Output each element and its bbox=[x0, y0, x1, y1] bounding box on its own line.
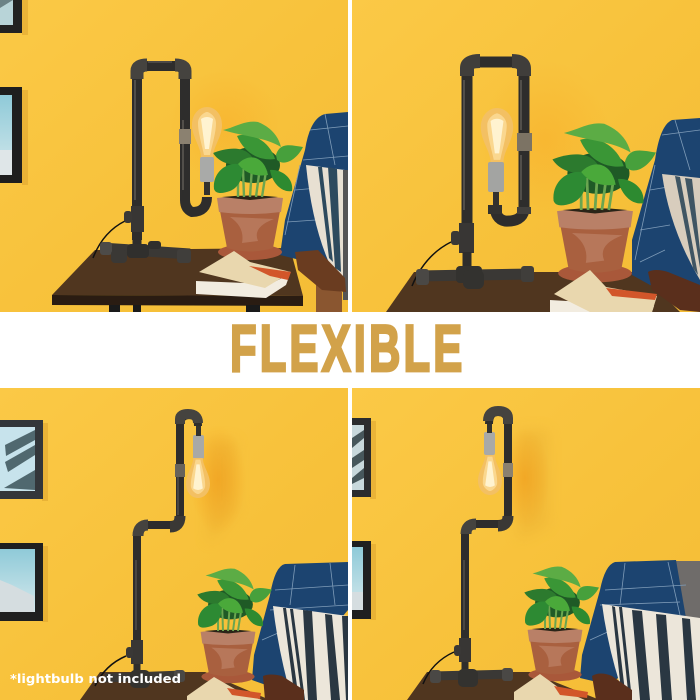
panel: lamp upright top left bbox=[0, 0, 348, 312]
blanket bbox=[580, 560, 686, 685]
socket bbox=[200, 157, 214, 195]
panel: lamp extended bottom right bbox=[352, 388, 700, 700]
coupling bbox=[175, 464, 185, 477]
base bar bbox=[132, 240, 142, 244]
coupling bbox=[503, 463, 513, 477]
bulb shadow on wall bbox=[190, 425, 246, 545]
lamp bbox=[105, 414, 198, 688]
striped cushion bbox=[662, 174, 700, 280]
framed picture top bbox=[0, 0, 28, 35]
framed picture lower bbox=[0, 543, 48, 622]
chair arm bbox=[263, 674, 304, 700]
panel: lamp extended bottom left bbox=[0, 388, 348, 700]
wall bbox=[352, 388, 700, 700]
striped cushion bbox=[273, 606, 348, 700]
striped cushion bbox=[306, 165, 348, 300]
tee fitting bbox=[131, 640, 143, 664]
coupling bbox=[517, 133, 532, 151]
striped cushion bbox=[602, 604, 700, 700]
framed picture top bbox=[0, 420, 48, 501]
pipes bbox=[465, 412, 508, 640]
table bbox=[407, 672, 600, 700]
footnote: lightbulb not included: *lightbulb not included bbox=[10, 671, 181, 686]
table bbox=[80, 672, 270, 700]
tee fitting bbox=[459, 223, 474, 253]
chair arm bbox=[592, 674, 632, 700]
wall bbox=[352, 0, 700, 312]
framed picture top bbox=[352, 418, 376, 499]
top elbow bbox=[488, 411, 508, 424]
lamp cable bbox=[423, 652, 454, 684]
grey sofa bbox=[672, 561, 700, 621]
elbows bbox=[467, 61, 480, 76]
table bbox=[52, 248, 303, 312]
pipes bbox=[137, 415, 198, 640]
light bulb bbox=[186, 458, 210, 498]
lamp bbox=[416, 61, 534, 289]
book bbox=[514, 674, 588, 700]
pipes bbox=[137, 66, 207, 240]
u bend collars bbox=[517, 207, 531, 214]
lamp cable bbox=[412, 242, 451, 286]
tee fitting bbox=[459, 638, 471, 662]
tee fitting bbox=[131, 206, 144, 232]
elbows bbox=[137, 65, 147, 79]
wall bbox=[0, 0, 348, 312]
blanket bbox=[280, 112, 348, 261]
base bar bbox=[462, 662, 468, 676]
lower elbows bbox=[138, 525, 148, 536]
plant pot bbox=[552, 123, 656, 282]
table bbox=[386, 272, 680, 312]
light bulb bbox=[192, 107, 222, 157]
bulb glow on wall bbox=[219, 112, 238, 138]
base bar bbox=[134, 664, 140, 678]
light bulb bbox=[478, 455, 502, 495]
base bar bbox=[462, 252, 472, 266]
top elbow bbox=[180, 414, 198, 424]
socket bbox=[488, 162, 504, 206]
book bbox=[550, 270, 657, 312]
lamp bbox=[100, 62, 207, 263]
book bbox=[187, 677, 262, 700]
bulb glow on wall bbox=[530, 120, 560, 160]
plant pot bbox=[524, 566, 599, 681]
chair arm bbox=[648, 270, 700, 312]
light bulb bbox=[481, 108, 513, 162]
lamp bbox=[430, 411, 513, 687]
panel: lamp upright top right bbox=[352, 0, 700, 312]
bulb shadow on wall bbox=[500, 428, 550, 540]
framed picture lower bbox=[0, 87, 28, 185]
blanket bbox=[632, 118, 700, 300]
lower elbows bbox=[466, 524, 476, 534]
heading: FLEXIBLE: FLEXIBLE bbox=[230, 311, 462, 385]
book bbox=[196, 251, 291, 298]
blanket bbox=[252, 562, 348, 690]
lamp cable bbox=[95, 656, 126, 686]
framed picture lower bbox=[352, 541, 376, 620]
chair arm bbox=[295, 250, 346, 312]
plant pot bbox=[197, 568, 272, 683]
wall bbox=[0, 388, 348, 700]
socket bbox=[193, 426, 204, 459]
lamp cable bbox=[93, 221, 125, 258]
plant pot bbox=[213, 122, 303, 260]
pipes bbox=[467, 62, 524, 230]
coupling bbox=[179, 129, 191, 144]
socket bbox=[484, 424, 495, 455]
